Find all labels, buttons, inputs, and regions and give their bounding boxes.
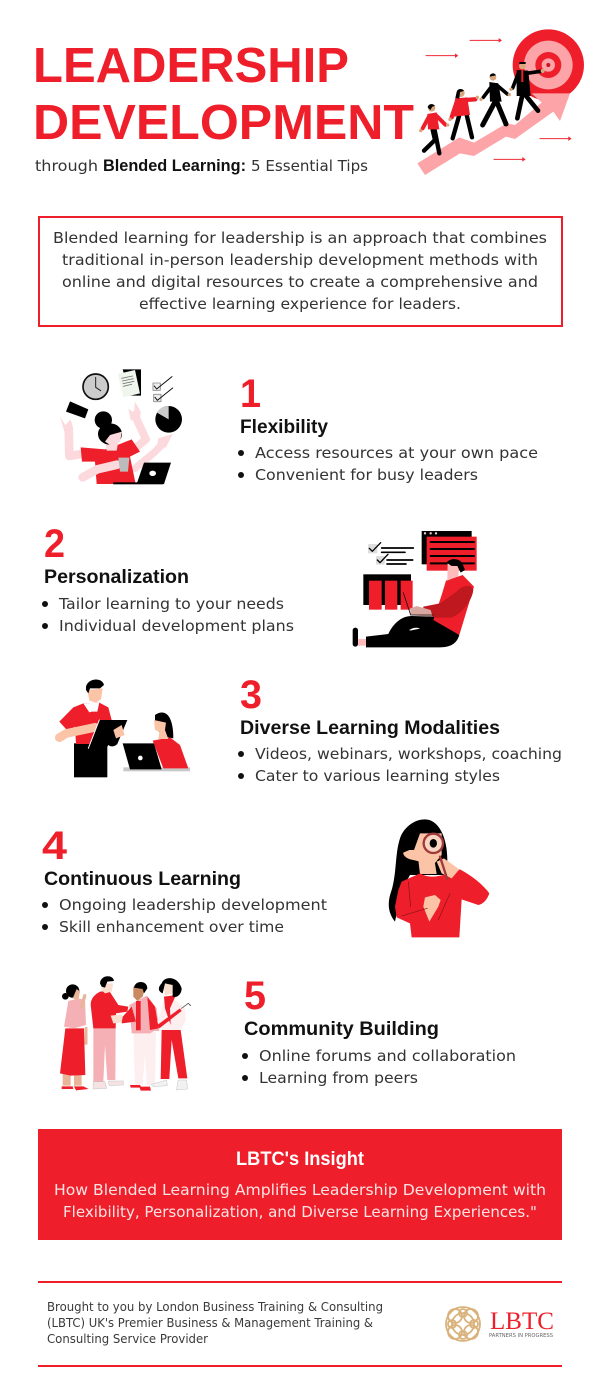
intro box: Blended learning for leadership is an approach that combines: [53, 229, 547, 247]
icon: leaders climbing arrow to target: [417, 29, 584, 175]
icon: group of four colleagues: [60, 976, 191, 1091]
bullet list: Cater to various learning styles: [255, 767, 500, 785]
bullet list: Access resources at your own pace: [255, 444, 538, 462]
subtitle: 5 Essential Tips: [251, 157, 368, 175]
bullet list: [242, 1047, 516, 1087]
number 4: 4: [42, 824, 68, 868]
bullet list: Skill enhancement over time: [59, 918, 284, 936]
number 5: 5: [244, 974, 266, 1018]
bullet list: [238, 444, 538, 484]
subtitle: through: [35, 157, 98, 175]
bullet list: Ongoing leadership development: [59, 896, 327, 914]
footer text: Consulting Service Provider: [47, 1332, 208, 1346]
icon: multitasking woman: [60, 369, 182, 484]
footer text: (LBTC) UK's Premier Business & Management Training &: [47, 1316, 373, 1330]
title: DEVELOPMENT: [33, 96, 414, 150]
logo tagline: PARTNERS IN PROGRESS: [489, 1333, 553, 1339]
insight text: How Blended Learning Amplifies Leadership Development with: [54, 1181, 546, 1199]
logo: LBTC: [446, 1307, 554, 1341]
heading: personalization: Personalization: [44, 567, 189, 588]
icon: man and woman with tablet and laptop: [59, 679, 190, 777]
bullet list: [238, 745, 562, 785]
bullet list: Videos, webinars, workshops, coaching: [255, 745, 562, 763]
number 2: 2: [44, 522, 65, 566]
subtitle: [35, 156, 368, 175]
logo wordmark: LBTC: [490, 1308, 554, 1335]
number 3: 3: [240, 673, 262, 717]
heading: diverse learning modalities: Diverse Learning Modalities: [240, 718, 500, 739]
icon: man working on laptop: [353, 531, 477, 647]
bullet list: [42, 896, 327, 936]
bullet list: Convenient for busy leaders: [255, 466, 478, 484]
panel: tip 4 continuous learning: [42, 824, 327, 936]
heading: continuous learning: Continuous Learning: [44, 869, 241, 890]
insight text: Flexibility, Personalization, and Diverse Learning Experiences.": [63, 1203, 537, 1221]
footer text: Brought to you by London Business Training & Consulting: [47, 1300, 383, 1314]
bullet list: Online forums and collaboration: [259, 1047, 516, 1065]
number 1: 1: [240, 372, 261, 416]
bullet list: Learning from peers: [259, 1069, 418, 1087]
subtitle: Blended Learning:: [103, 156, 246, 175]
logo emblem: [446, 1307, 480, 1341]
bullet list: Tailor learning to your needs: [58, 595, 284, 613]
panel: tip 5 community building: [242, 974, 516, 1087]
bullet list: Individual development plans: [59, 617, 294, 635]
heading: flexibility: Flexibility: [240, 417, 328, 438]
title: LEADERSHIP: [33, 39, 349, 93]
bullet list: [42, 595, 294, 635]
insight heading: LBTC's Insight: [236, 1149, 365, 1170]
title: [33, 39, 414, 150]
heading: community building: Community Building: [244, 1019, 439, 1040]
intro box: traditional in-person leadership development methods with: [62, 251, 538, 269]
footer text: [47, 1300, 383, 1346]
intro box: [39, 217, 562, 326]
intro box: online and digital resources to create a comprehensive and: [62, 273, 538, 291]
panel: LBTC's insight: [38, 1129, 562, 1240]
panel: tip 1 flexibility: [238, 372, 538, 484]
panel: tip 3 diverse learning modalities: [238, 673, 562, 785]
panel: tip 2 personalization: [42, 522, 294, 635]
insight text: [54, 1181, 546, 1221]
icon: woman with magnifying glass: [389, 819, 489, 937]
intro box: effective learning experience for leaders.: [139, 295, 461, 313]
